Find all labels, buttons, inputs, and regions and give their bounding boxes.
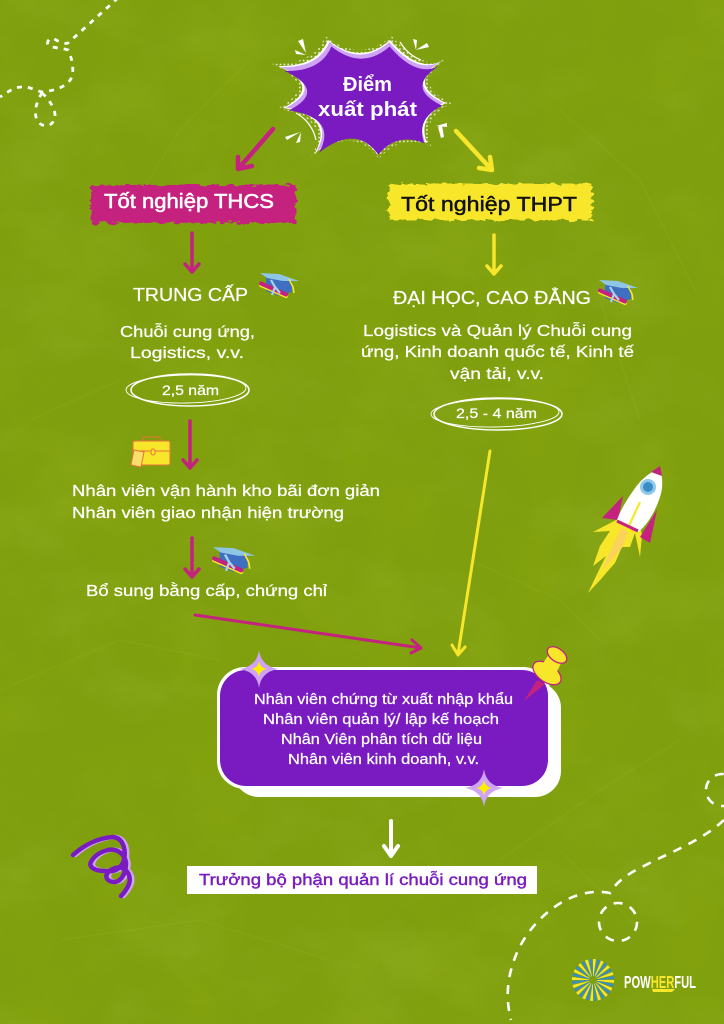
heading: Đại học, cao đẳng: ĐẠI HỌC, CAO ĐẲNG: [393, 287, 591, 308]
heading: Trung cấp: TRUNG CẤP: [133, 284, 248, 305]
text: fields: ứng, Kinh doanh quốc tế, Kinh tế: [361, 344, 634, 361]
text: fields: [120, 324, 255, 362]
column: Trung cấp: [120, 273, 299, 406]
box: Trưởng bộ phận quản lí chuỗi cung ứng: [187, 866, 537, 894]
icon: briefcase: [131, 437, 170, 467]
box: Trưởng bộ phận quản lí chuỗi cung ứng: Trưởng bộ phận quản lí chuỗi cung ứng: [199, 872, 527, 889]
text: fields: Chuỗi cung ứng,: [120, 324, 255, 341]
heading text: Điểm: [343, 74, 392, 96]
logo sunburst: [580, 968, 606, 992]
arrow: certificates to job box: [195, 615, 421, 653]
column: Đại học, cao đẳng: [361, 280, 638, 430]
job roles text: Nhân viên quản lý/ lập kế hoạch: [263, 712, 499, 728]
arrow: duration to job: [183, 421, 197, 468]
text: extra certificates: Bổ sung bằng cấp, chứng chỉ: [86, 583, 328, 600]
duration: 2,5 - 4 năm: [431, 398, 562, 430]
arrow: university to job box: [452, 451, 490, 655]
arrow: job box to manager: [384, 821, 398, 856]
heading text: [318, 74, 417, 121]
duration: 2,5 - 4 năm: 2,5 - 4 năm: [456, 405, 537, 421]
logo: Powherful: [580, 968, 696, 992]
banner: Tốt nghiệp THPT: Tốt nghiệp THPT: [401, 194, 577, 216]
icon: graduation cap: [260, 273, 299, 296]
duration: 2,5 năm: [126, 374, 249, 406]
text: fields: [361, 323, 634, 383]
icon: rocket: [588, 466, 662, 593]
arrow: start to THPT: [456, 131, 492, 170]
text: entry level jobs: Nhân viên vận hành kho bãi đơn giản: [72, 483, 380, 500]
decorative dashed path: top left: [0, 0, 118, 126]
banner: Tốt nghiệp THCS: Tốt nghiệp THCS: [104, 191, 274, 213]
arrow: THPT to Đại học: [487, 235, 501, 274]
starburst: Điểm xuất phát: [272, 36, 452, 159]
banner: Tốt nghiệp THCS: [91, 185, 296, 223]
text: fields: Logistics và Quản lý Chuỗi cung: [363, 323, 632, 340]
panel: job roles: [217, 667, 561, 797]
duration: 2,5 năm: 2,5 năm: [162, 382, 219, 398]
arrow: start to THCS: [238, 129, 273, 169]
heading text: xuất phát: [318, 99, 417, 121]
job roles text: Nhân viên chứng từ xuất nhập khẩu: [254, 692, 513, 708]
icon: sparkle top left: [240, 650, 278, 688]
job roles text: Nhân Viên phân tích dữ liệu: [281, 732, 482, 748]
logo wordmark: POWHERFUL: [624, 972, 696, 992]
icon: push pin: [524, 643, 570, 701]
icon: graduation cap: [213, 547, 255, 572]
icon: graduation cap: [599, 280, 638, 303]
text: entry level jobs: Nhân viên giao nhận hiện trường: [72, 505, 344, 522]
text: entry level jobs: [72, 483, 380, 522]
decorative dashed path: bottom right: [508, 774, 724, 1020]
icon: sparkle bottom right: [465, 769, 503, 807]
icon: purple scribble: [73, 837, 132, 896]
text: fields: vận tải, v.v.: [450, 366, 544, 383]
arrow: job to extra certificates: [185, 538, 199, 577]
job roles text: Nhân viên kinh doanh, v.v.: [288, 752, 479, 768]
arrow: THCS to Trung cấp: [185, 233, 199, 272]
text: fields: Logistics, v.v.: [130, 345, 244, 362]
banner: Tốt nghiệp THPT: [389, 184, 592, 220]
job roles text: [254, 692, 513, 768]
